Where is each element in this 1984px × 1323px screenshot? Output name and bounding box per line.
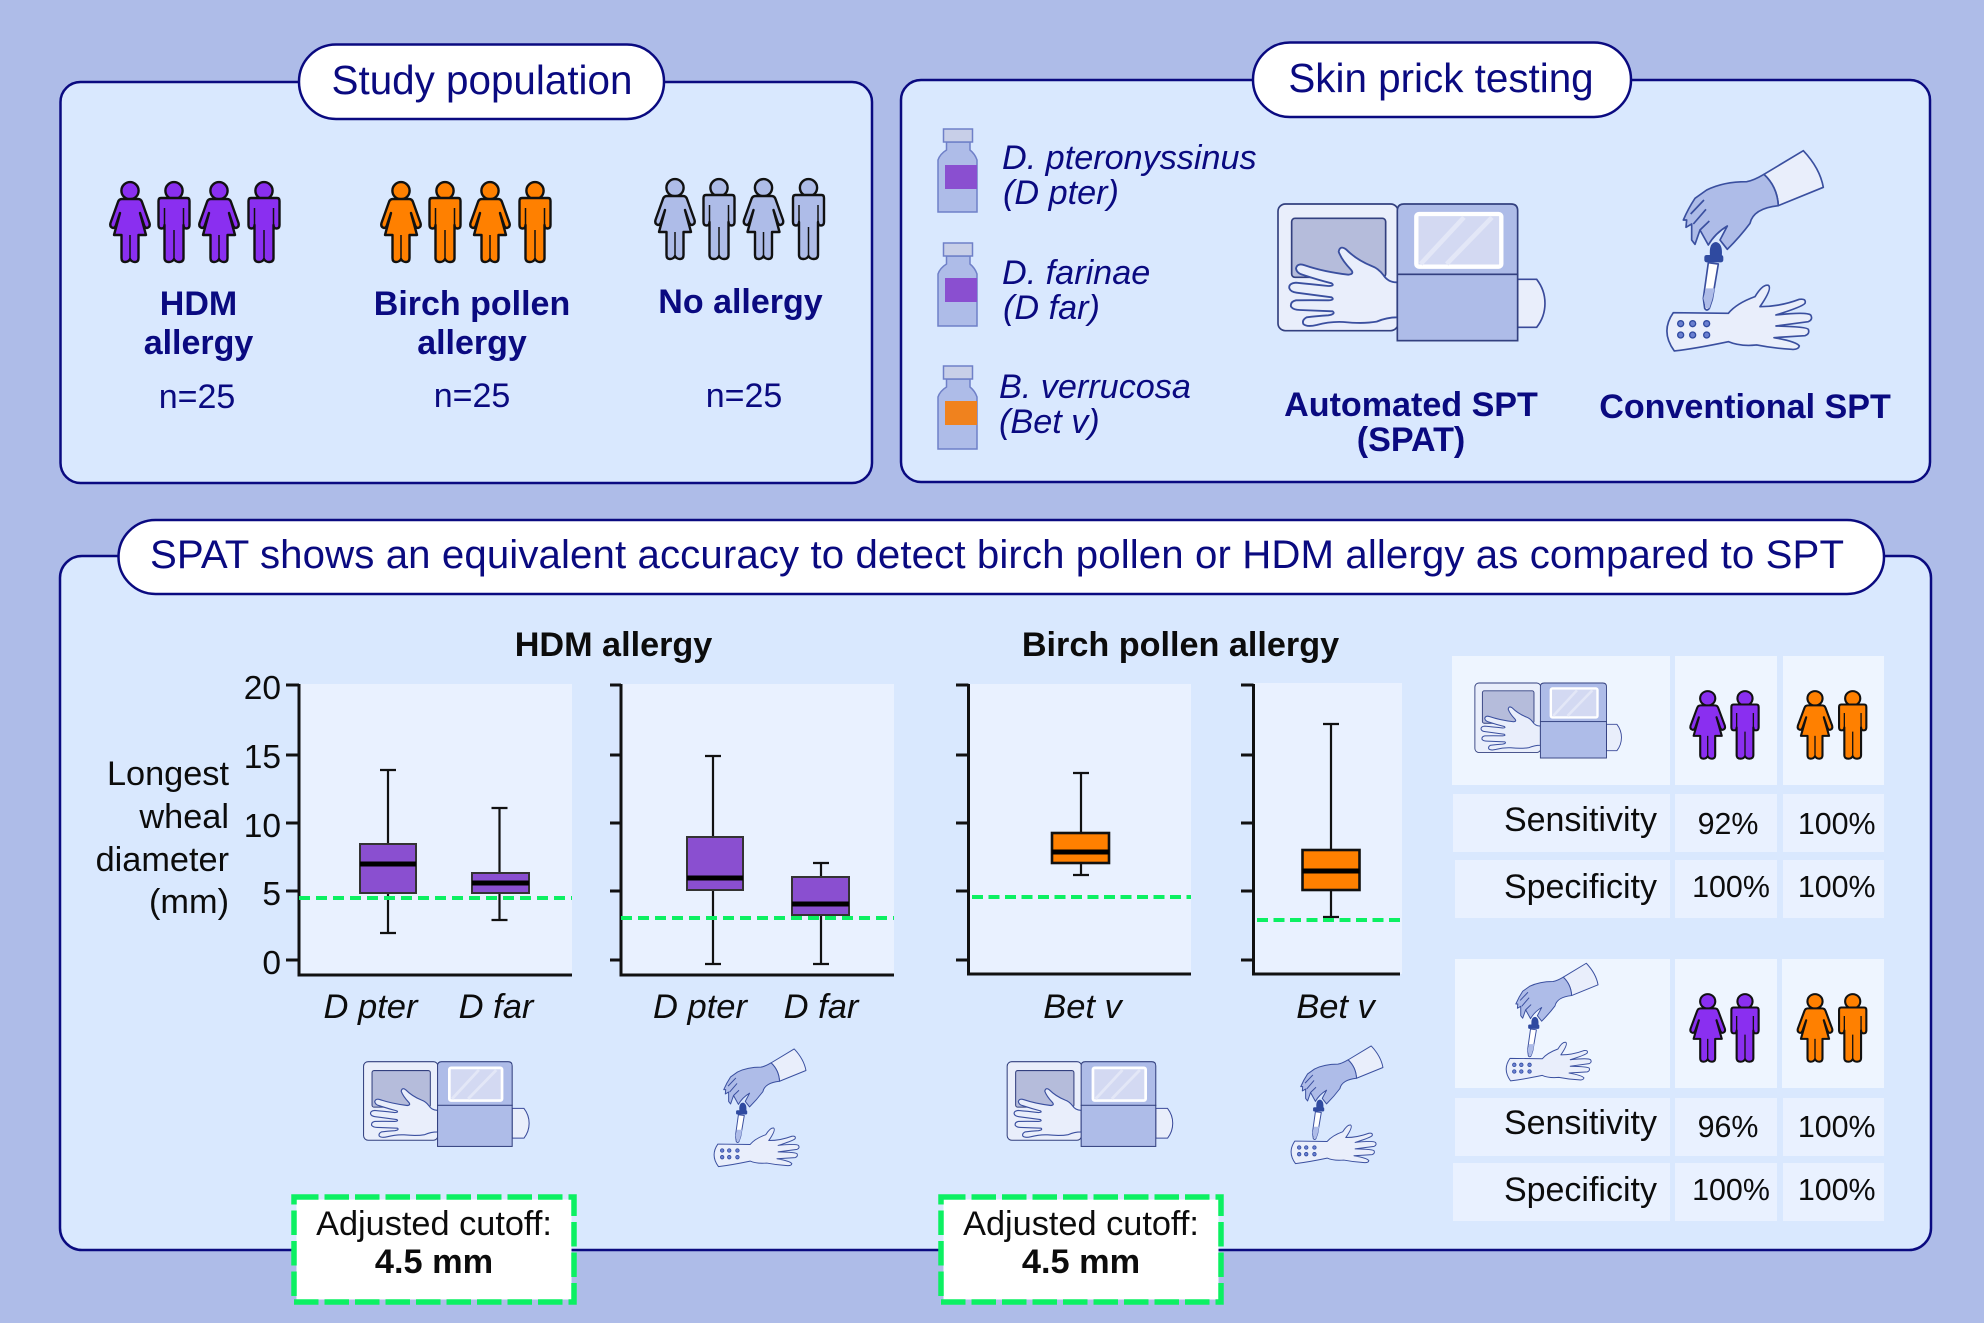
x labels: D pter [324, 988, 419, 1026]
label: HDM allergy: allergy [144, 324, 253, 362]
values: 100% [1798, 1173, 1876, 1207]
icon: vial D pter [938, 129, 977, 212]
label: D. farinae: (D far) [1003, 289, 1100, 327]
x labels: D far [784, 988, 860, 1026]
x labels: Bet v [1043, 988, 1124, 1026]
icon: birch people [1798, 994, 1866, 1062]
icon: device under HDM chart [364, 1062, 529, 1146]
heading pill: Study population [299, 44, 664, 119]
box plot: birch SPAT [956, 684, 1191, 974]
icon: device under birch chart [1007, 1062, 1173, 1146]
panel: results [60, 520, 1931, 1250]
label: D. pteronyssinus: D. pteronyssinus [1002, 139, 1257, 177]
heading pill: Skin prick testing: Skin prick testing [1288, 55, 1594, 101]
x labels: D pter [653, 988, 748, 1026]
table: automated SPT accuracy [1452, 656, 1884, 918]
label: Birch pollen allergy: Birch pollen [374, 285, 570, 323]
panel: study population [60, 44, 872, 483]
icon: vial Bet v [938, 366, 977, 449]
y axis numbers: 5 [262, 876, 281, 913]
callout: adjusted cutoff HDM: 4.5 mm [375, 1243, 493, 1281]
icon: conventional SPT [1667, 151, 1823, 351]
values: 96% [1698, 1110, 1758, 1144]
y axis label: Longest [107, 755, 229, 793]
values: 100% [1798, 1110, 1876, 1144]
row labels: Sensitivity [1504, 1104, 1657, 1142]
box plot: birch conventional [1241, 683, 1402, 974]
heading pill: SPAT conclusion: SPAT shows an equivalent accuracy to detect birch pollen or HDM allergy as compared to SPT [150, 532, 1844, 577]
callout: adjusted cutoff HDM [294, 1197, 574, 1302]
icon: device [1475, 683, 1621, 758]
count: birch: n=25 [434, 377, 510, 415]
label: B. verrucosa: B. verrucosa [999, 368, 1191, 406]
label: No allergy: No allergy [658, 283, 823, 321]
values: 92% [1698, 807, 1758, 841]
x labels: Bet v [1296, 988, 1377, 1026]
row labels: Specificity [1504, 868, 1657, 906]
label: Birch pollen allergy: allergy [417, 324, 527, 362]
callout: adjusted cutoff HDM: Adjusted cutoff: [316, 1205, 552, 1243]
label: D. farinae: D. farinae [1002, 254, 1150, 292]
count: HDM: n=25 [159, 378, 235, 416]
label: Automated SPT: Automated SPT [1284, 386, 1538, 424]
y axis label: (mm) [149, 883, 229, 921]
icon: vial D far [938, 243, 977, 326]
heading pill: SPAT conclusion [118, 520, 1884, 594]
values: 100% [1798, 807, 1876, 841]
y axis numbers: 20 [244, 670, 281, 707]
label: Automated SPT: (SPAT) [1357, 421, 1465, 459]
heading pill: Study population: Study population [332, 57, 632, 103]
icon: conventional under HDM chart [714, 1049, 806, 1167]
y axis numbers: 0 [262, 945, 281, 982]
y axis numbers: 10 [244, 808, 281, 845]
count: no allergy: n=25 [706, 377, 782, 415]
row labels: Sensitivity [1504, 801, 1657, 839]
values: 100% [1692, 870, 1770, 904]
chart title: Birch pollen allergy: Birch pollen allergy [1022, 626, 1339, 664]
icon: conventional [1506, 963, 1598, 1081]
y axis numbers: 15 [244, 739, 281, 776]
x labels: D far [459, 988, 535, 1026]
icon group: HDM allergy people [110, 182, 280, 262]
icon: birch people [1798, 691, 1866, 759]
chart title: HDM allergy: HDM allergy [515, 626, 712, 664]
box plot: HDM SPAT [286, 684, 572, 975]
table: conventional SPT accuracy [1453, 959, 1884, 1221]
values: 100% [1798, 870, 1876, 904]
callout: adjusted cutoff birch [941, 1197, 1221, 1302]
heading pill: Skin prick testing [1253, 42, 1631, 117]
callout: adjusted cutoff birch: Adjusted cutoff: [963, 1205, 1199, 1243]
icon: HDM people [1690, 994, 1759, 1062]
y axis label: diameter [96, 841, 229, 879]
icon: HDM people [1690, 691, 1759, 759]
label: Conventional SPT: Conventional SPT [1599, 388, 1891, 426]
icon: conventional under birch chart [1291, 1046, 1383, 1164]
label: HDM allergy: HDM [160, 285, 237, 323]
panel: skin prick testing [901, 42, 1930, 482]
icon group: birch pollen allergy people [381, 182, 550, 262]
values: 100% [1692, 1173, 1770, 1207]
box plot: HDM conventional [610, 684, 894, 975]
label: D. pteronyssinus: (D pter) [1003, 174, 1119, 212]
icon: automated SPT device [1278, 204, 1545, 341]
label: B. verrucosa: (Bet v) [999, 403, 1100, 441]
y axis label: wheal [138, 798, 229, 836]
row labels: Specificity [1504, 1171, 1657, 1209]
callout: adjusted cutoff birch: 4.5 mm [1022, 1243, 1140, 1281]
icon group: no allergy people [655, 179, 824, 259]
